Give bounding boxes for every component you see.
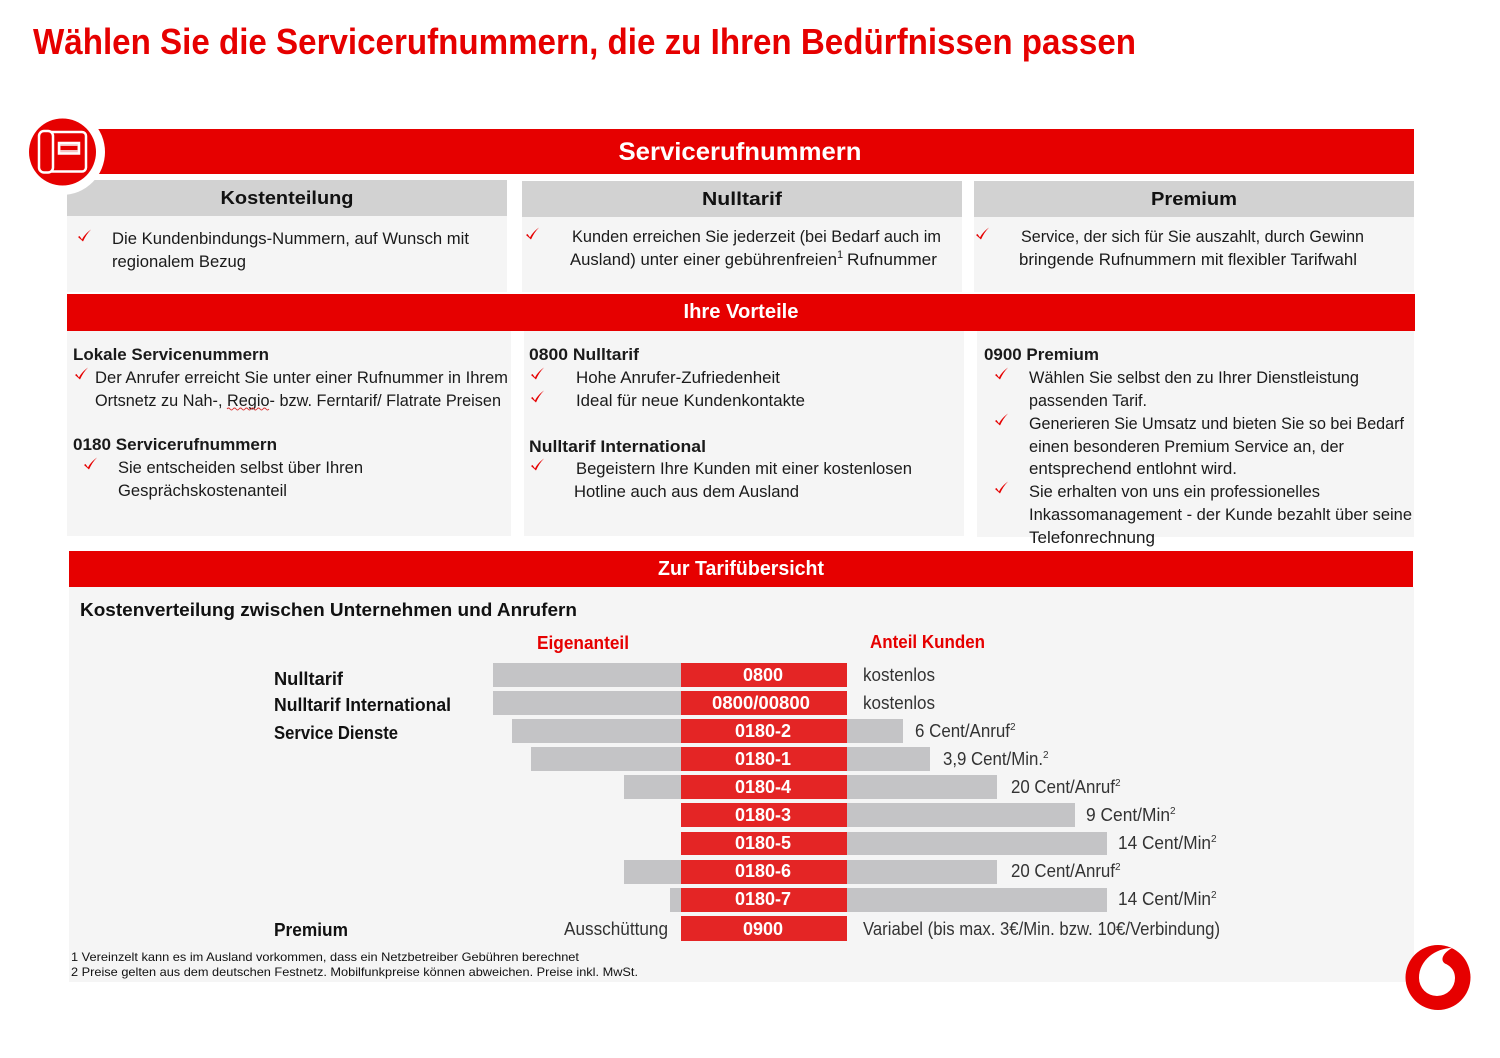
panel: 0900 Premium: Telefonrechnung — [1029, 528, 1155, 547]
panel: 0900 Premium: Generieren Sie Umsatz und bieten Sie so bei Bedarf — [1029, 414, 1404, 433]
diverging bar chart: kostenlos — [863, 665, 935, 685]
panel: Kostenteilung — [67, 180, 507, 292]
category labels: Service Dienste — [274, 723, 398, 743]
diverging bar chart: kostenlos — [863, 693, 935, 713]
diverging bar chart: 0800/00800 — [712, 693, 810, 713]
diverging bar chart: 14 Cent/Min — [1118, 889, 1211, 909]
banner: Ihre Vorteile — [67, 294, 1415, 331]
diverging bar chart: 9 Cent/Min — [1086, 805, 1170, 825]
diverging bar chart: 0180-1 — [735, 749, 791, 769]
panel: 0800 Nulltarif: Nulltarif International — [529, 437, 706, 456]
panel: 0900 Premium — [977, 331, 1414, 547]
panel: Lokale Servicenummern und 0180: 0180 Servicerufnummern — [73, 435, 277, 454]
panel: Premium: bringende Rufnummern mit flexibler Tarifwahl — [1019, 250, 1357, 269]
panel: 0800 Nulltarif: Hohe Anrufer-Zufriedenheit — [576, 368, 780, 387]
diverging bar chart: 0180-2 — [735, 721, 791, 741]
banner: Zur Tarifübersicht — [69, 551, 1413, 587]
panel: Premium: Premium — [1151, 189, 1237, 209]
panel: Nulltarif — [522, 181, 962, 292]
panel: Lokale Servicenummern und 0180: Der Anrufer erreicht Sie unter einer Rufnummer in Ihrem — [95, 368, 508, 387]
panel: Kostenteilung: regionalem Bezug — [112, 252, 246, 271]
chart heading: Kostenverteilung zwischen Unternehmen und Anrufern — [80, 600, 577, 620]
panel: 0800 Nulltarif — [524, 331, 964, 536]
panel: Nulltarif: Kunden erreichen Sie jederzeit (bei Bedarf auch im — [572, 227, 941, 246]
panel: 0800 Nulltarif: Hotline auch aus dem Ausland — [574, 482, 799, 501]
panel: 0900 Premium: entsprechend entlohnt wird. — [1029, 459, 1237, 478]
panel: Lokale Servicenummern und 0180: Lokale Servicenummern — [73, 345, 269, 364]
panel: 0900 Premium: Inkassomanagement - der Kunde bezahlt über seine — [1029, 505, 1412, 524]
column heading: Eigenanteil: Eigenanteil — [537, 633, 629, 653]
column heading: Anteil Kunden: Anteil Kunden — [870, 632, 985, 652]
panel: Lokale Servicenummern und 0180: Sie entscheiden selbst über Ihren — [118, 458, 363, 477]
category labels: Premium — [274, 920, 348, 940]
panel: Nulltarif: Rufnummer — [847, 250, 937, 269]
diverging bar chart: 0800 — [743, 665, 783, 685]
panel: 0900 Premium: Wählen Sie selbst den zu Ihrer Dienstleistung — [1029, 368, 1359, 387]
diverging bar chart: 3,9 Cent/Min. — [943, 749, 1043, 769]
panel: Tarifübersicht background — [69, 587, 1414, 982]
diverging bar chart: 2 — [1043, 750, 1049, 761]
title: Wählen Sie die Servicerufnummern, die zu Ihren Bedürfnissen passen — [33, 21, 1136, 62]
panel: Nulltarif: Nulltarif — [702, 189, 783, 209]
diverging bar chart: 20 Cent/Anruf — [1011, 861, 1116, 881]
panel: Premium: Service, der sich für Sie auszahlt, durch Gewinn — [1021, 227, 1364, 246]
panel: Premium — [974, 181, 1414, 292]
diverging bar chart: 2 — [1211, 834, 1217, 845]
diverging bar chart: 0180-3 — [735, 805, 791, 825]
diverging bar chart: 14 Cent/Min — [1118, 833, 1211, 853]
panel: 0900 Premium: Sie erhalten von uns ein professionelles — [1029, 482, 1320, 501]
diverging bar chart: 0180-4 — [735, 777, 791, 797]
diverging bar chart — [493, 663, 1220, 941]
banner: Ihre Vorteile: Ihre Vorteile — [684, 301, 798, 323]
icon: telephone badge — [19, 109, 105, 195]
category labels — [274, 669, 451, 940]
panel: 0900 Premium: einen besonderen Premium Service an, der — [1029, 437, 1344, 456]
diverging bar chart: 20 Cent/Anruf — [1011, 777, 1116, 797]
panel: Nulltarif: Ausland) unter einer gebührenfreien — [570, 250, 837, 269]
banner: Servicerufnummern — [90, 129, 1414, 174]
banner: Zur Tarifübersicht: Zur Tarifübersicht — [658, 558, 824, 580]
diverging bar chart: Ausschüttung — [564, 919, 668, 939]
diverging bar chart: 2 — [1170, 806, 1176, 817]
diverging bar chart: 2 — [1010, 722, 1016, 733]
panel: 0800 Nulltarif: Ideal für neue Kundenkontakte — [576, 391, 805, 410]
diverging bar chart: 0180-7 — [735, 889, 791, 909]
panel: Kostenteilung: Kostenteilung — [220, 188, 354, 208]
diverging bar chart: 0180-6 — [735, 861, 791, 881]
panel: Lokale Servicenummern und 0180: Ortsnetz zu Nah-, Regio- bzw. Ferntarif/ Flatrate Preisen — [95, 391, 501, 410]
diverging bar chart: 6 Cent/Anruf — [915, 721, 1011, 741]
footnotes: 1 Vereinzelt kann es im Ausland vorkommen, dass ein Netzbetreiber Gebühren berechnet — [71, 950, 580, 964]
diverging bar chart: 2 — [1115, 862, 1121, 873]
diverging bar chart: 2 — [1115, 778, 1121, 789]
panel: Lokale Servicenummern und 0180 — [67, 331, 511, 536]
diverging bar chart: 2 — [1211, 890, 1217, 901]
panel: 0900 Premium: 0900 Premium — [984, 345, 1099, 364]
diverging bar chart: 0180-5 — [735, 833, 791, 853]
icon: Vodafone logo — [1406, 945, 1470, 1010]
footnotes: 2 Preise gelten aus dem deutschen Festnetz. Mobilfunkpreise können abweichen. Preise inkl. MwSt. — [71, 965, 638, 979]
panel: Kostenteilung: Die Kundenbindungs-Nummern, auf Wunsch mit — [112, 229, 469, 248]
category labels: Nulltarif — [274, 669, 344, 689]
diverging bar chart: 0900 — [743, 919, 783, 939]
panel: 0900 Premium: passenden Tarif. — [1029, 391, 1147, 410]
panel: 0800 Nulltarif: 0800 Nulltarif — [529, 345, 639, 364]
diverging bar chart: Variabel (bis max. 3€/Min. bzw. 10€/Verbindung) — [863, 919, 1220, 939]
category labels: Nulltarif International — [274, 695, 451, 715]
panel: 0800 Nulltarif: Begeistern Ihre Kunden mit einer kostenlosen — [576, 459, 912, 478]
banner: Servicerufnummern: Servicerufnummern — [618, 138, 862, 166]
panel: Lokale Servicenummern und 0180: Gesprächskostenanteil — [118, 481, 287, 500]
panel: Nulltarif: 1 — [837, 249, 843, 261]
footnotes — [71, 950, 638, 979]
